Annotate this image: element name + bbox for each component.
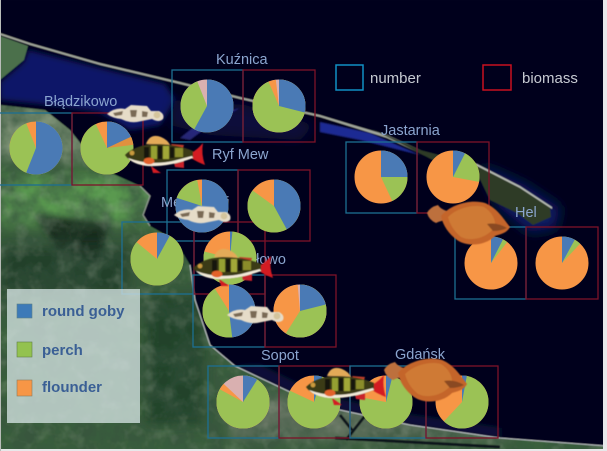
label: Gdańsk: Gdańsk <box>395 347 446 363</box>
icon: flounder 2 <box>384 359 467 402</box>
label: Hel: Hel <box>515 205 537 221</box>
pie: Kuźnica number <box>194 93 220 119</box>
legend: number and biomass frames: biomass <box>522 70 578 87</box>
legend: number and biomass frames: number <box>370 70 421 87</box>
legend item: round goby: round goby <box>42 303 125 320</box>
icon: round goby 1 <box>107 105 164 122</box>
pie: Hel number <box>478 250 504 276</box>
icon: flounder 1 <box>427 202 510 245</box>
label: Kuźnica: Kuźnica <box>216 52 269 68</box>
pie: Kuźnica biomass <box>266 93 292 119</box>
pie: Orłowo number <box>216 298 242 324</box>
pie: Sopot biomass <box>301 389 327 415</box>
pie: Ryf Mew number <box>189 193 215 219</box>
icon: perch 2 <box>193 249 273 286</box>
pie: Gdańsk number <box>373 389 399 415</box>
icon: perch 3 <box>306 368 386 405</box>
pie: Błądzikowo number <box>23 135 49 161</box>
species legend panel <box>7 289 140 423</box>
label: Sopot: Sopot <box>261 348 299 364</box>
legend item: perch: perch <box>42 342 83 359</box>
icon: perch 1 <box>125 136 205 173</box>
pie: Mechelinki number <box>144 246 170 272</box>
pie: Jastarnia number <box>368 164 394 190</box>
pie: Orłowo biomass <box>287 298 313 324</box>
icon: round goby 2 <box>174 206 230 223</box>
pie: Ryf Mew biomass <box>261 193 287 219</box>
icon: round goby 3 <box>227 306 284 323</box>
pie: Mechelinki biomass <box>217 245 243 271</box>
label: Orłowo: Orłowo <box>240 252 286 268</box>
pie: Błądzikowo biomass <box>94 135 120 161</box>
pie: Sopot number <box>230 389 256 415</box>
pie: Gdańsk biomass <box>449 389 475 415</box>
label: Mechelinki: Mechelinki <box>161 195 230 211</box>
pie: Jastarnia biomass <box>440 164 466 190</box>
legend item: flounder: flounder <box>42 379 102 396</box>
label: Ryf Mew: Ryf Mew <box>212 147 269 163</box>
pie: Hel biomass <box>549 250 575 276</box>
legend: number and biomass frames <box>336 65 578 90</box>
land <box>0 105 607 451</box>
label: Jastarnia: Jastarnia <box>381 123 441 139</box>
label: Błądzikowo: Błądzikowo <box>44 94 117 110</box>
